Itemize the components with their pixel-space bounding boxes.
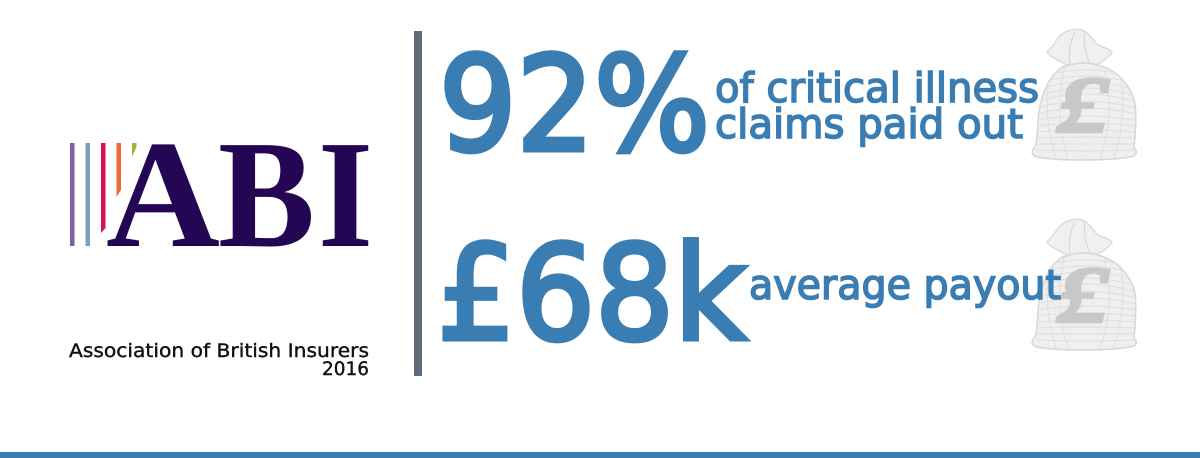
logo wordmark: B (218, 110, 315, 280)
footer rule (0, 452, 1200, 458)
stat number: £68k (437, 217, 746, 370)
logo wordmark: I (318, 110, 373, 280)
stat: 92% (439, 28, 1039, 181)
icon: money bag bottom (1032, 219, 1136, 350)
vertical divider (414, 31, 422, 376)
source: year: 2016 (322, 358, 369, 380)
stat: £68k (437, 217, 1061, 370)
logo stripes (70, 143, 136, 246)
stat label (715, 64, 1039, 148)
icon: money bag top (1032, 29, 1136, 160)
stat label: average payout (749, 261, 1061, 309)
logo: ABI (70, 110, 373, 280)
stat label: of critical illness (715, 64, 1039, 112)
stat number: 92% (439, 28, 710, 181)
logo wordmark (106, 110, 373, 280)
source: organisation: Association of British Insurers (69, 340, 369, 362)
logo wordmark: A (106, 110, 220, 280)
stat label: claims paid out (715, 100, 1023, 148)
